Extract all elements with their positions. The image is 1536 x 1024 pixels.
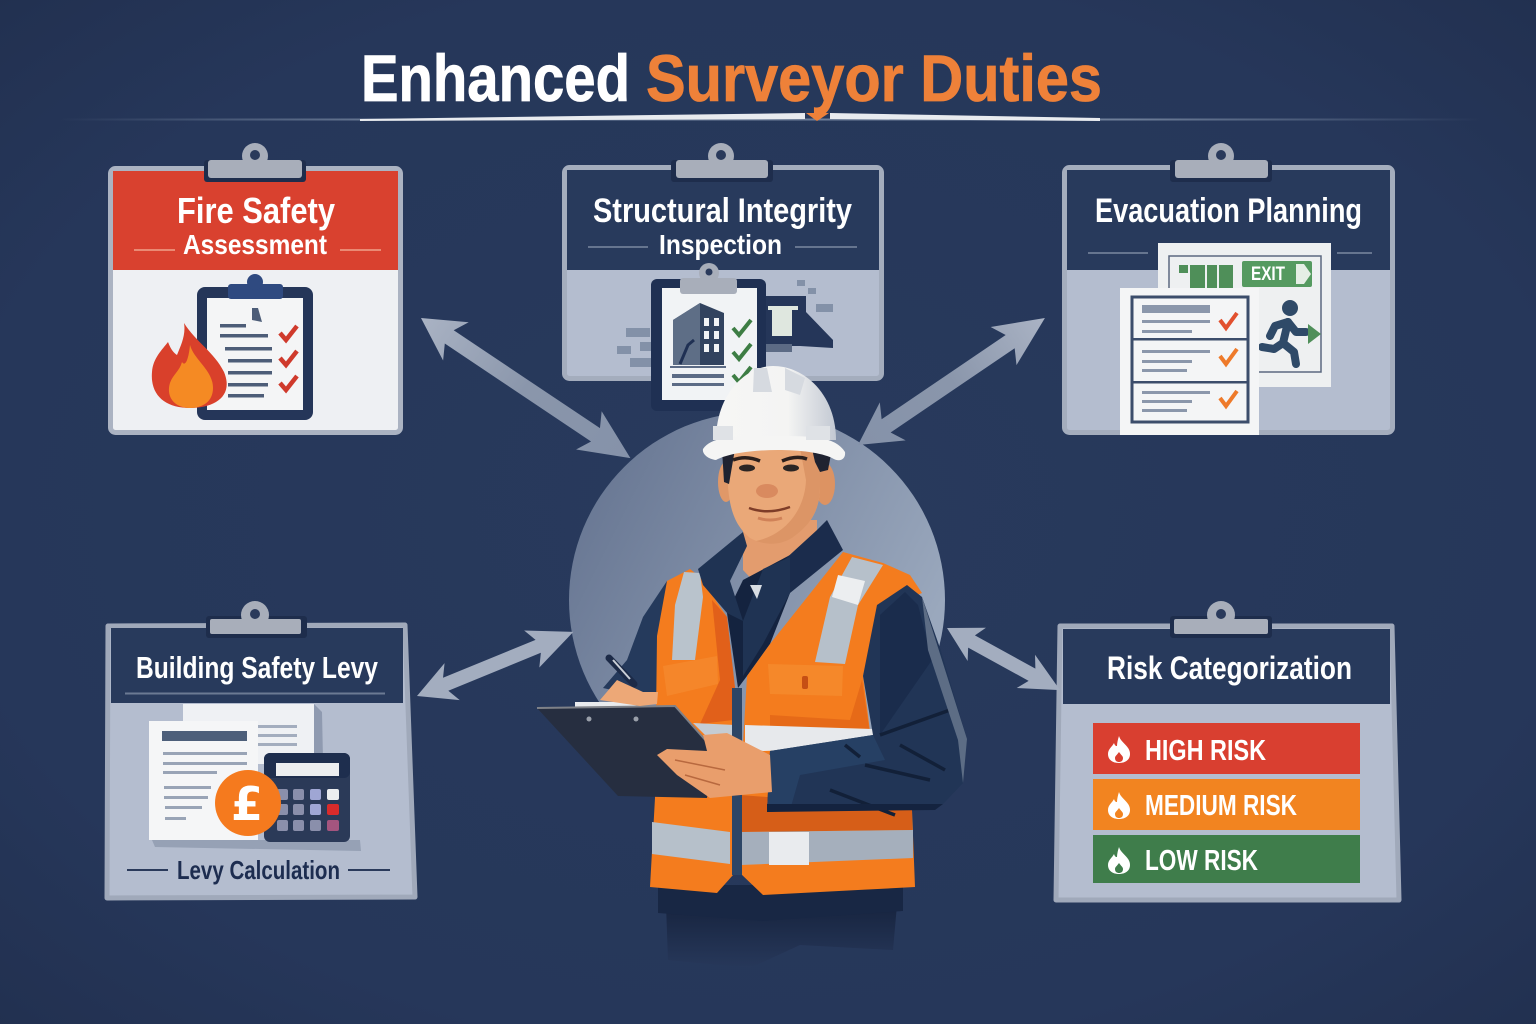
- icon: calculator: [264, 753, 350, 842]
- holding hand: [657, 733, 772, 798]
- caption rules: [127, 869, 390, 871]
- caption: levy calculation: Levy Calculation: [177, 855, 340, 885]
- icon: pound coin: [215, 770, 281, 836]
- panel: fire safety assessment: [110, 143, 400, 432]
- collar right: [770, 520, 843, 593]
- clip: levy panel: [206, 601, 307, 638]
- heading: risk categorization: Risk Categorization: [1107, 650, 1352, 686]
- arrow: fire safety to surveyor: [408, 299, 643, 477]
- risk row: low: LOW RISK: [1145, 845, 1258, 877]
- risk row: high: HIGH RISK: [1145, 735, 1266, 767]
- shirt placket: [743, 557, 790, 676]
- clip: fire safety panel: [204, 143, 306, 182]
- icon: inspection clipboard: [651, 263, 766, 411]
- exit sign: [1242, 261, 1312, 287]
- risk row: low: [1093, 835, 1360, 883]
- waist band: [745, 725, 873, 751]
- clip: structural panel: [671, 143, 773, 182]
- pen: [609, 658, 634, 684]
- panel: structural integrity inspection: [564, 143, 882, 378]
- subheading: inspection: Inspection: [659, 229, 782, 260]
- checklist document: [1120, 288, 1259, 435]
- title: Enhanced: [361, 41, 630, 115]
- heading: building safety levy: Building Safety Levy: [136, 650, 379, 685]
- head: [718, 448, 835, 544]
- header rule: [125, 692, 385, 694]
- right sleeve: [767, 585, 967, 815]
- evacuation route map: [1158, 243, 1331, 387]
- lower band: [652, 822, 730, 864]
- panel: building safety levy: [107, 601, 415, 898]
- jacket under vest: [727, 555, 790, 688]
- icon: levy documents: [149, 704, 361, 851]
- floorplan bars: [1179, 265, 1233, 289]
- exit arrow: [1308, 324, 1321, 344]
- risk row: high: [1093, 723, 1360, 774]
- shirt collar tip: [750, 585, 762, 599]
- scattered bricks: [617, 280, 833, 367]
- header rules: [588, 246, 857, 248]
- risk row: medium: MEDIUM RISK: [1145, 790, 1297, 822]
- trousers: [666, 905, 897, 968]
- clip: risk panel: [1170, 601, 1272, 638]
- arrow: risk to surveyor: [938, 611, 1069, 707]
- collar left: [698, 532, 747, 621]
- zipper: [732, 688, 742, 875]
- heading: fire safety: Fire Safety: [177, 190, 335, 231]
- title: [361, 41, 1102, 115]
- arrow: evacuation to surveyor: [845, 299, 1058, 464]
- header rules: [1088, 252, 1372, 254]
- header rules: [134, 249, 381, 251]
- panel: risk categorization: [1056, 601, 1399, 900]
- icon: checklist clipboard: [197, 274, 313, 420]
- icon: secondary document: [766, 296, 833, 352]
- panel: evacuation planning: [1064, 143, 1392, 435]
- icon: pound coin: £: [231, 777, 263, 831]
- icon: running figure: [1262, 300, 1306, 364]
- subheading: assessment: Assessment: [183, 229, 327, 260]
- building: [673, 303, 724, 365]
- clipboard: [537, 702, 715, 798]
- icon: flame: [152, 323, 227, 408]
- title: Surveyor Duties: [646, 41, 1102, 115]
- title underline: [60, 113, 1480, 121]
- hard hat: [703, 366, 845, 460]
- heading: evacuation planning: Evacuation Planning: [1095, 192, 1362, 230]
- vest right: [740, 552, 922, 895]
- surveyor figure: [537, 366, 967, 968]
- neck: [743, 520, 817, 590]
- arrow: levy to surveyor: [409, 613, 581, 715]
- reflective strip right: [815, 557, 883, 664]
- reflective strip left: [672, 572, 703, 660]
- vest left: [650, 569, 735, 893]
- risk row: medium: [1093, 779, 1360, 830]
- left sleeve: [603, 581, 680, 700]
- heading: structural integrity: Structural Integrity: [593, 192, 852, 230]
- clip: evacuation panel: [1170, 143, 1272, 182]
- central halo circle: [569, 412, 945, 788]
- chest pockets: [663, 656, 718, 696]
- belt: [658, 885, 903, 921]
- exit sign: EXIT: [1251, 264, 1285, 285]
- writing hand: [600, 680, 658, 706]
